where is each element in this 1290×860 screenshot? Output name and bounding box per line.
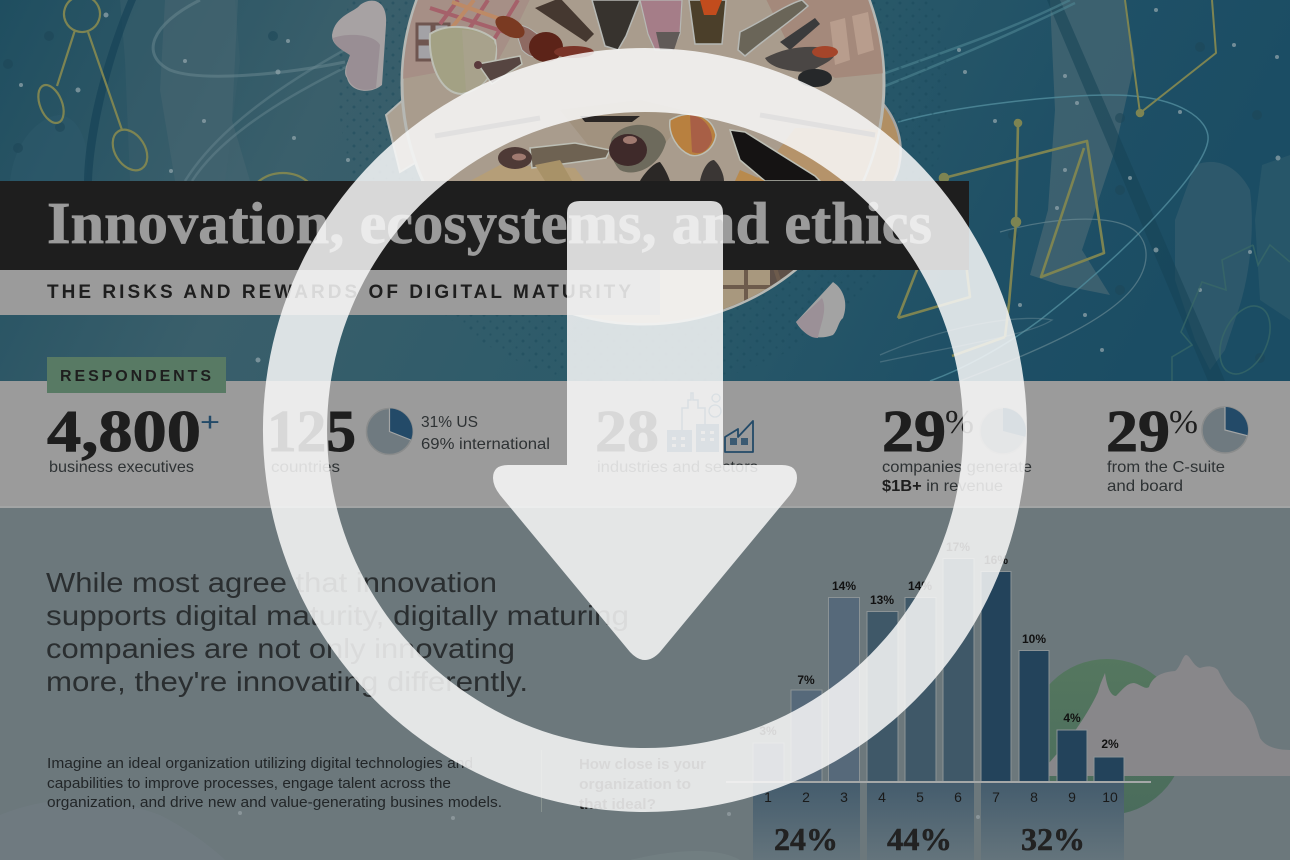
stat: 125 countries: 125 — [267, 398, 356, 464]
chart: bars of closeness to ideal — [726, 540, 1151, 860]
stat: 29% from the C-suite and board: from the C-suite — [1107, 459, 1225, 476]
stat: 29% from the C-suite and board: 29 — [1106, 398, 1170, 464]
bar axis labels: 2 — [802, 789, 810, 805]
heading: key finding — [46, 567, 629, 697]
bar axis labels — [764, 789, 1118, 805]
bar axis labels: 1 — [764, 789, 772, 805]
range backgrounds — [753, 782, 1124, 860]
pie chart: 29% companies — [980, 408, 1026, 454]
pale blob lower right — [796, 282, 845, 338]
stat: 29% from the C-suite and board — [1106, 398, 1225, 495]
bar value labels: 17% — [946, 540, 970, 554]
pie legend — [421, 414, 550, 453]
stat: 28 industries and sectors: 28 — [595, 398, 659, 464]
bar value labels: 3% — [759, 724, 777, 738]
bar value labels: 16% — [984, 553, 1008, 567]
heading: key finding: supports digital maturity, digitally maturing — [46, 600, 629, 631]
range totals — [774, 821, 1085, 857]
stat: 4,800+ business executives — [47, 398, 220, 476]
text block: ideal organization: capabilities to improve processes, engage talent across the — [47, 776, 451, 792]
icon: download ring and arrow overlay — [263, 48, 1027, 812]
bar axis labels: 9 — [1068, 789, 1076, 805]
text block: ideal organization — [47, 756, 502, 811]
constellation lines: right — [898, 0, 1216, 356]
range totals: 32% — [1021, 821, 1085, 857]
title: Innovation, ecosystems, and ethics — [47, 190, 932, 256]
pie legend: 69% international — [421, 436, 550, 453]
bar axis labels: 5 — [916, 789, 924, 805]
icon: city and factory — [667, 393, 753, 452]
label: respondents: RESPONDENTS — [60, 368, 211, 385]
pie chart: 31% US, 69% international — [366, 408, 413, 454]
text block: question: organization to — [579, 776, 691, 793]
bar value labels: 7% — [797, 673, 815, 687]
bar value labels: 14% — [832, 579, 856, 593]
stat: 29% from the C-suite and board: and board — [1107, 478, 1183, 495]
panel: hero illustration background — [0, 0, 1290, 388]
text block: question: How close is your — [579, 756, 706, 773]
range totals: 24% — [774, 821, 838, 857]
stat: 4,800+ business executives: 4,800 — [47, 398, 201, 464]
text block: ideal organization: organization, and drive new and value-generating busines models. — [47, 795, 502, 811]
text block: ideal organization: Imagine an ideal organization utilizing digital technologies and — [47, 756, 473, 772]
bar value labels: 4% — [1063, 711, 1081, 725]
illustration: green circle and mountain — [1029, 655, 1290, 815]
stat: 28 industries and sectors — [595, 398, 758, 476]
bar value labels: 2% — [1101, 737, 1119, 751]
bar axis labels: 3 — [840, 789, 848, 805]
stat: 4,800+ business executives: + — [200, 407, 220, 437]
bar axis labels: 7 — [992, 789, 1000, 805]
stat: 29% companies generate $1B+ in revenue — [882, 398, 1032, 495]
heading: key finding: more, they're innovating differently. — [46, 666, 528, 697]
stat: 29% companies generate $1B+ in revenue: 29 — [882, 398, 946, 464]
heading: key finding: companies are not only innovating — [46, 633, 515, 664]
range totals: 44% — [887, 821, 952, 857]
bar axis labels: 4 — [878, 789, 886, 805]
text block: question: that ideal? — [579, 796, 656, 813]
illustration: circular collage of people — [386, 0, 901, 330]
bar value labels: 10% — [1022, 632, 1046, 646]
panel: lower section background — [0, 508, 1290, 860]
heading: key finding: While most agree that innovation — [46, 567, 497, 598]
bars — [753, 558, 1124, 782]
stat: 28 industries and sectors: industries and sectors — [597, 459, 758, 476]
panel: title bar — [0, 181, 969, 270]
panel: subtitle bar — [0, 270, 660, 315]
bar axis labels: 8 — [1030, 789, 1038, 805]
stat: 4,800+ business executives: business executives — [49, 459, 194, 476]
stat: 29% companies generate $1B+ in revenue: $1B+ in revenue — [882, 478, 1003, 495]
stat: 29% from the C-suite and board: % — [1169, 404, 1198, 441]
stat: 29% companies generate $1B+ in revenue: % — [945, 404, 974, 441]
stat: 125 countries: countries — [271, 459, 340, 476]
bar value labels: 13% — [870, 593, 894, 607]
bar axis labels: 10 — [1102, 789, 1118, 805]
bar axis labels: 6 — [954, 789, 962, 805]
subtitle: THE RISKS AND REWARDS OF DIGITAL MATURITY — [47, 282, 631, 303]
pie legend: 31% US — [421, 414, 478, 431]
bar value labels: 14% — [908, 579, 932, 593]
bar value labels — [759, 540, 1119, 751]
panel: respondents band — [0, 381, 1290, 508]
pale blob upper left — [332, 1, 386, 91]
stat: 29% companies generate $1B+ in revenue: companies generate — [882, 459, 1032, 476]
text block: question — [579, 756, 706, 813]
label: respondents — [47, 357, 226, 393]
pie chart: 29% C-suite — [1202, 407, 1248, 453]
constellation lines: left — [33, 0, 319, 237]
